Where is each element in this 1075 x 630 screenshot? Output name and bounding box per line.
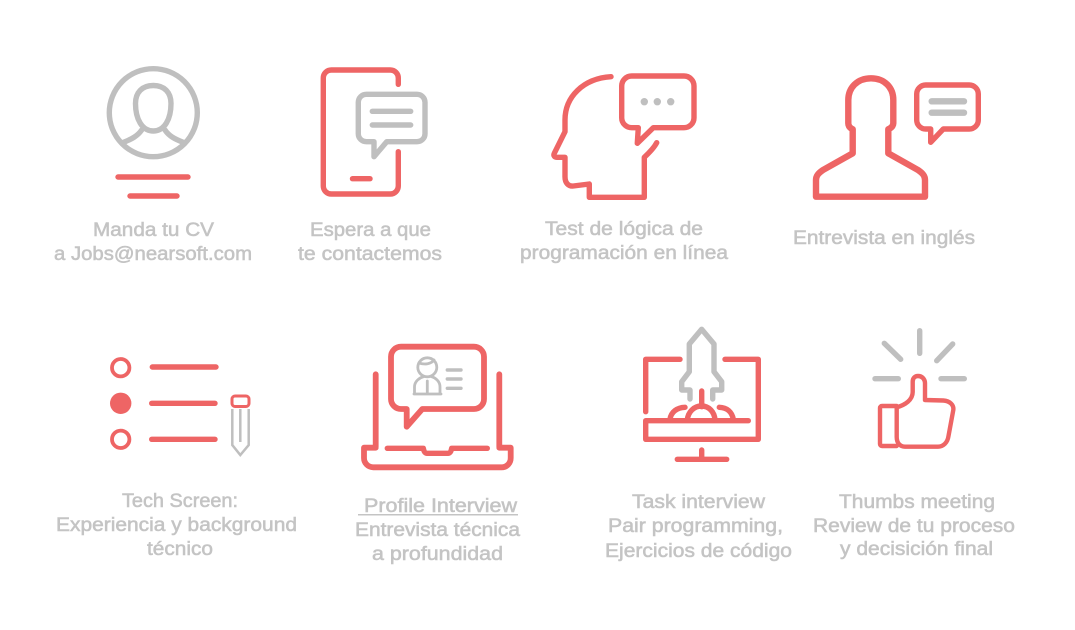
- text: Tech Screen: Tech Screen:: [122, 490, 238, 512]
- text: Test de lógica: [520, 218, 728, 264]
- text: Thumbs meeting: [813, 491, 1015, 560]
- text: Entrevista en inglés: Entrevista en inglés: [793, 227, 975, 249]
- text: Thumbs meeting: Review de tu proceso: [813, 515, 1015, 537]
- text: Manda tu CV: a Jobs@nearsoft.com: [54, 243, 252, 265]
- icon: rocket launching from monitor: [646, 329, 758, 459]
- icon: thumbs up: [875, 331, 964, 447]
- text: Task interview: [605, 491, 792, 562]
- text: Task interview: Pair programming,: [608, 515, 783, 537]
- icon: laptop with profile bubble: [364, 347, 511, 467]
- icon: head with thought bubble: [554, 76, 694, 197]
- icon: phone with message: [323, 70, 425, 194]
- text: Profile Interview: Entrevista técnica: [355, 519, 520, 541]
- text: Task interview: Task interview: [632, 491, 766, 513]
- text: Task interview: Ejercicios de código: [605, 540, 792, 562]
- text: Thumbs meeting: Thumbs meeting: [839, 491, 995, 513]
- text: Espera a que: [298, 219, 442, 265]
- text: Profile Interview: a profundidad: [372, 543, 503, 565]
- text: Tech Screen: Experiencia y background: [56, 514, 297, 536]
- icon: checklist with pencil: [110, 359, 249, 455]
- text: Espera a que: Espera a que: [310, 219, 431, 241]
- text: Thumbs meeting: y decisición final: [840, 538, 993, 560]
- text: Tech Screen: [56, 490, 297, 560]
- text: Test de lógica: programación en línea: [520, 242, 728, 264]
- text: Tech Screen: técnico: [147, 538, 213, 560]
- text: Test de lógica: Test de lógica de: [545, 218, 703, 240]
- text: Espera a que: te contactemos: [298, 243, 442, 265]
- text: Profile Interview: Profile Interview: [364, 495, 518, 517]
- icon: person with speech bubble: [816, 78, 978, 197]
- icon: CV profile: [109, 69, 197, 196]
- text: Manda tu CV: Manda tu CV: [93, 219, 214, 241]
- text: Profile Interview: [355, 495, 520, 565]
- text: Manda tu CV: [54, 219, 252, 265]
